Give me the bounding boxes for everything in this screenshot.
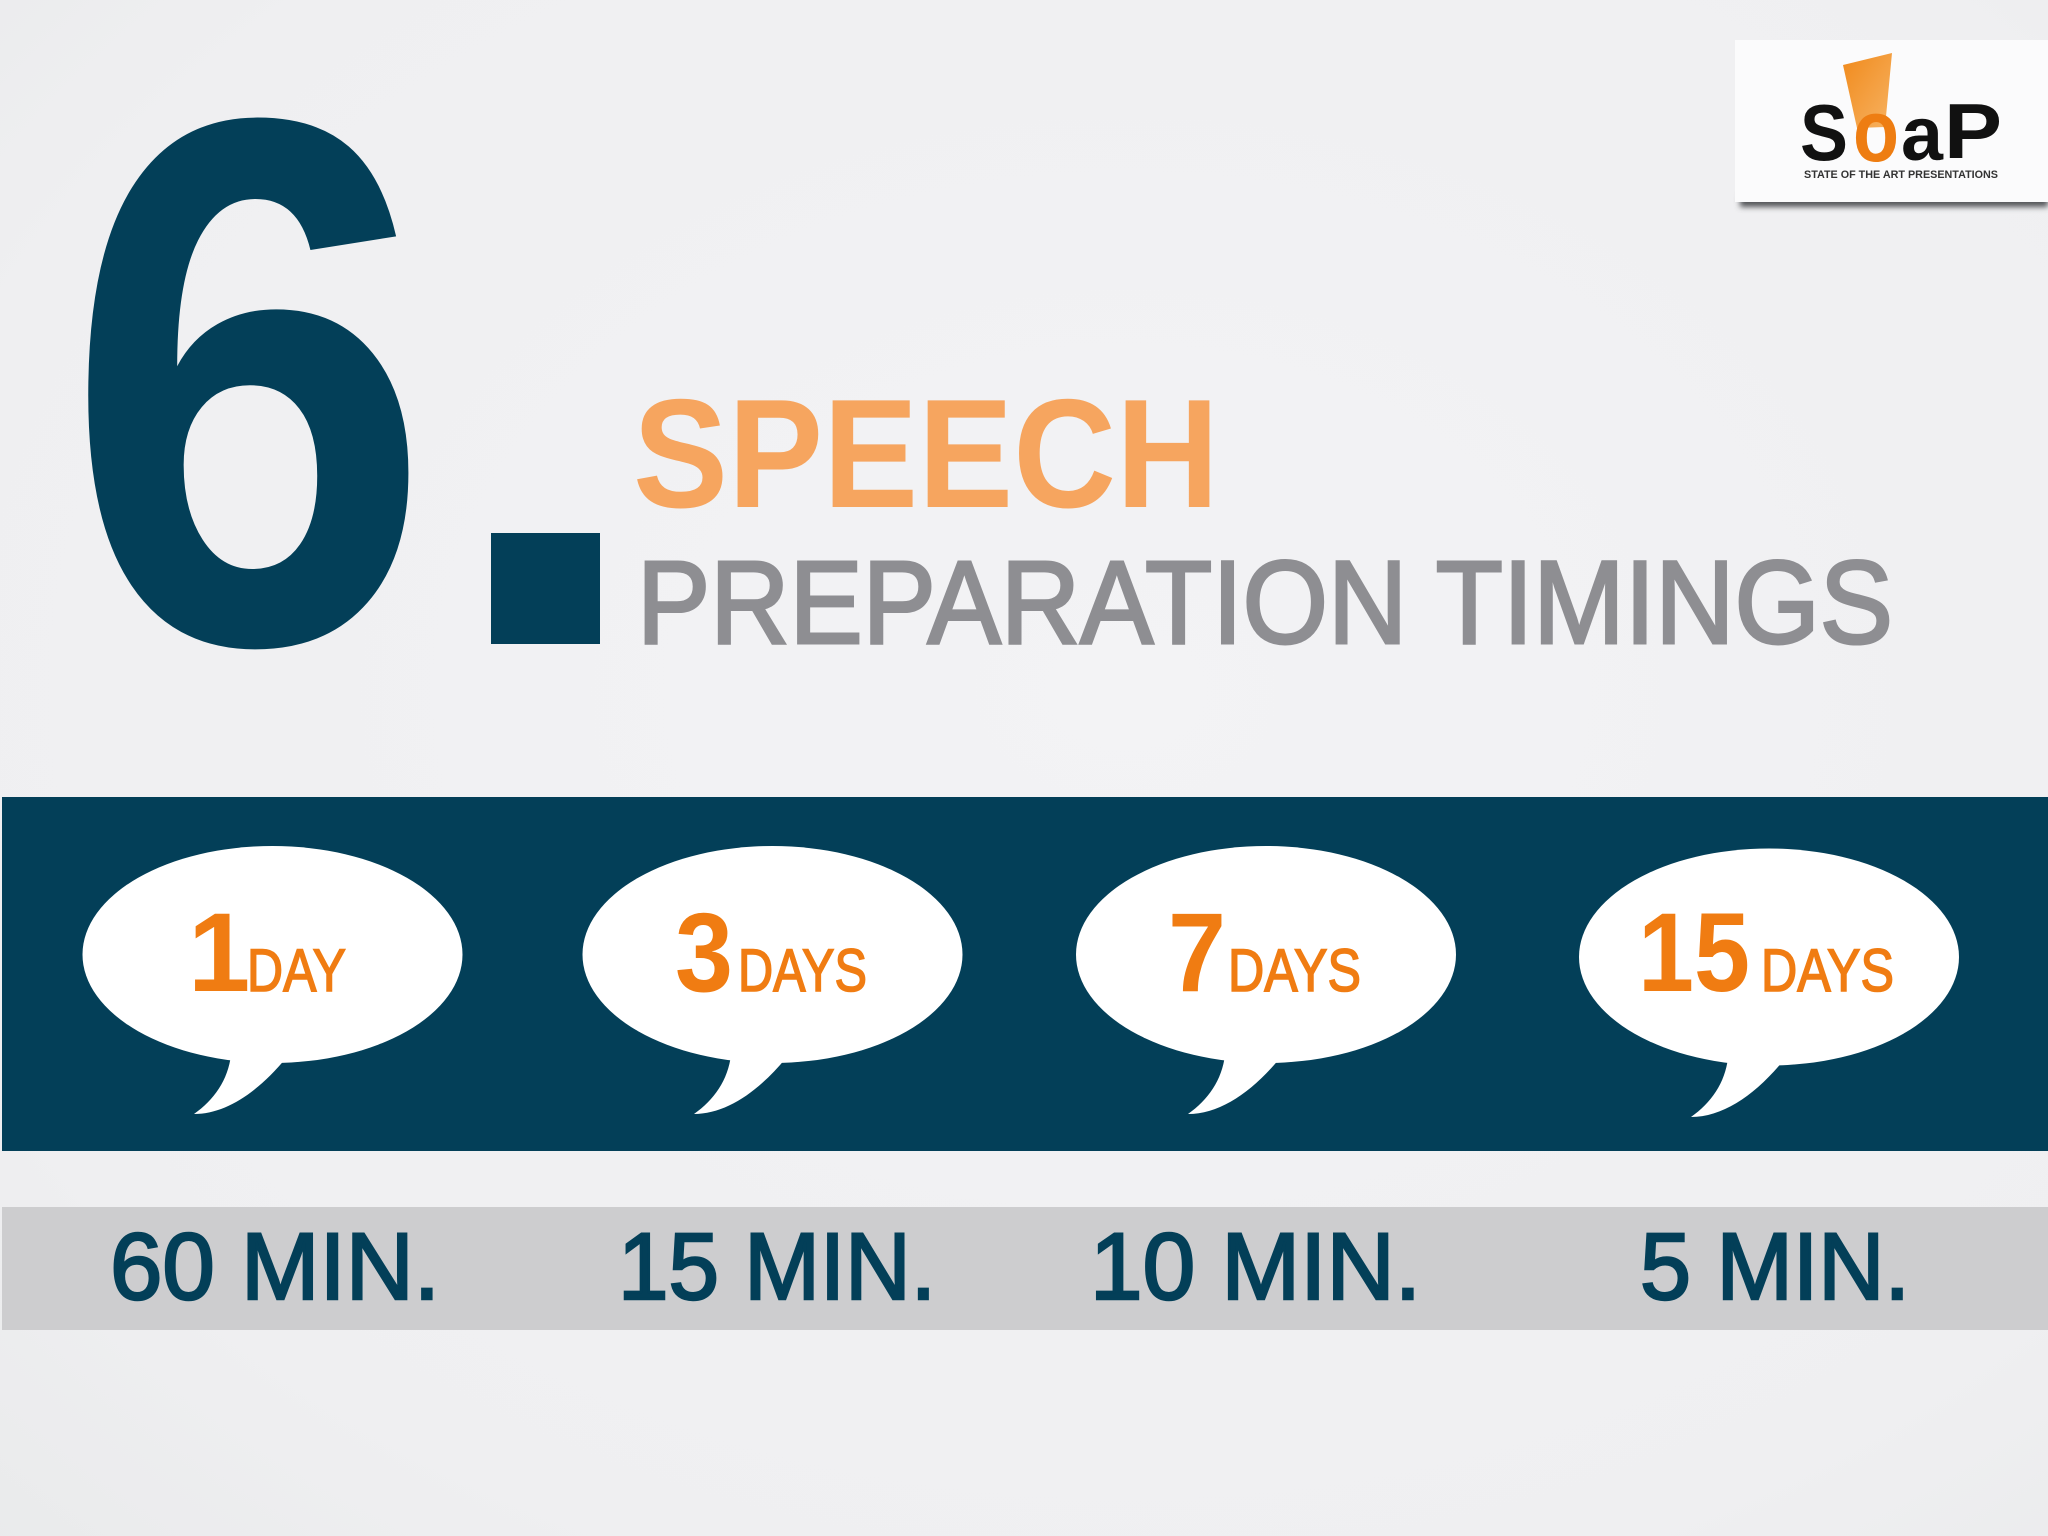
speech bubble: 1 day: DAY [247,937,346,1004]
speech bubble: 15 days: DAYS [1761,937,1894,1004]
speech bubble: 1 day: 1 [188,890,250,1015]
speech bubble: 15 days [1579,848,1959,1117]
speech bubble: 3 days: 3 [675,890,733,1015]
speech bubble: 3 days: DAYS [738,937,867,1004]
panel: grey band [2,1207,2048,1330]
speech bubble: 1 day [82,846,462,1114]
speech bubble: 7 days: 7 [1168,890,1226,1015]
label: 5 min: 5 MIN. [1640,1214,1910,1320]
big number period [491,533,600,644]
speech bubble: 7 days [1076,846,1456,1114]
label: 15 min: 15 MIN. [618,1214,936,1320]
title: PREPARATION TIMINGS: PREPARATION TIMINGS [637,537,1893,669]
logo: o [1853,81,1899,180]
logo: STATE OF THE ART PRESENTATIONS [1804,169,1998,181]
speech bubble: 3 days [582,846,962,1114]
label: 10 min: 10 MIN. [1090,1214,1421,1320]
speech bubble: 15 days: 15 [1638,890,1750,1015]
logo: a [1901,92,1944,177]
speech bubble: 7 days: DAYS [1228,937,1361,1004]
panel: dark blue band [2,797,2048,1151]
logo [1735,40,2048,207]
logo: P [1944,87,2002,175]
logo: S [1800,88,1848,177]
title: SPEECH: SPEECH [633,367,1219,540]
label: 60 min: 60 MIN. [110,1214,440,1320]
